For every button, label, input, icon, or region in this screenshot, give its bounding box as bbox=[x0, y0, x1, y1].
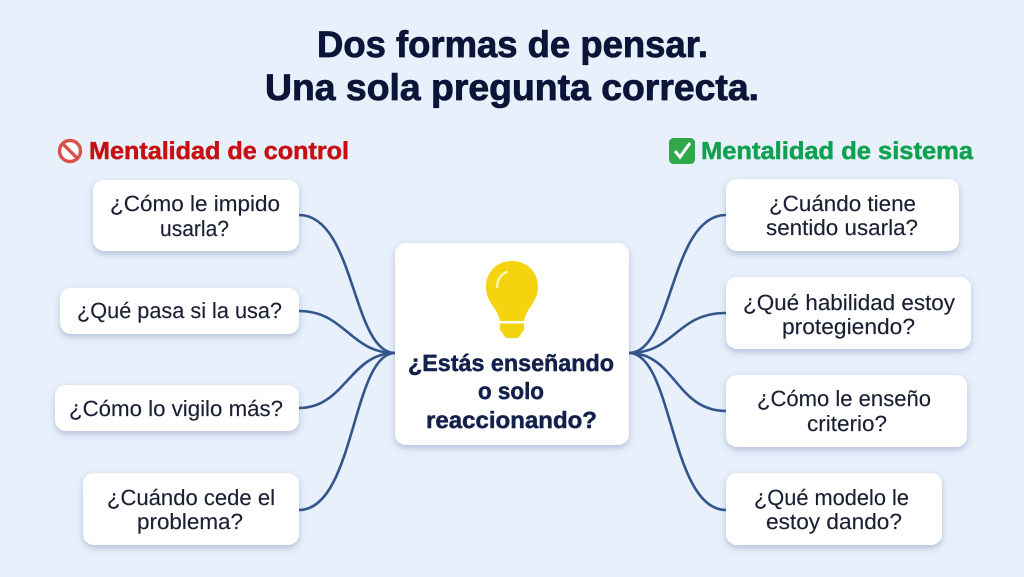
right card 3: criterio? bbox=[807, 411, 887, 436]
icon: check mark bbox=[669, 138, 695, 164]
right card 2: ¿Qué habilidad estoy bbox=[743, 290, 955, 315]
left card 4: problema? bbox=[137, 509, 243, 534]
connectors: right bbox=[629, 215, 726, 510]
left card 4: ¿Cuándo cede el bbox=[107, 485, 275, 510]
connectors: left bbox=[299, 215, 395, 510]
title bbox=[265, 24, 759, 108]
right card 2: protegiendo? bbox=[782, 314, 915, 339]
icon: prohibited sign bbox=[60, 140, 80, 162]
title: Una sola pregunta correcta. bbox=[265, 67, 759, 108]
right card 1: sentido usarla? bbox=[766, 215, 918, 240]
right card 3 bbox=[726, 375, 967, 447]
right card 1 bbox=[726, 179, 959, 251]
right card 4 bbox=[726, 473, 942, 545]
left card 1: usarla? bbox=[160, 216, 229, 241]
left card 4 bbox=[83, 473, 299, 545]
right card 3: ¿Cómo le enseño bbox=[757, 386, 931, 411]
heading: control mindset: Mentalidad de control bbox=[89, 138, 349, 165]
left card 1 bbox=[93, 180, 299, 251]
center card: ¿Estás enseñando bbox=[408, 350, 614, 376]
icon: light bulb bbox=[486, 261, 538, 338]
right card 4: ¿Qué modelo le bbox=[754, 485, 909, 510]
center card bbox=[395, 243, 629, 445]
left card 3: ¿Cómo lo vigilo más? bbox=[69, 396, 283, 421]
center card: reaccionando? bbox=[426, 407, 597, 433]
left card 3 bbox=[55, 385, 299, 431]
left card 2: ¿Qué pasa si la usa? bbox=[77, 298, 282, 323]
center card: o solo bbox=[478, 378, 544, 404]
right card 1: ¿Cuándo tiene bbox=[769, 191, 916, 216]
right card 2 bbox=[726, 277, 971, 349]
title: Dos formas de pensar. bbox=[317, 24, 708, 65]
left card 2 bbox=[60, 288, 299, 334]
right card 4: estoy dando? bbox=[766, 509, 902, 534]
left card 1: ¿Cómo le impido bbox=[110, 191, 280, 216]
heading: system mindset: Mentalidad de sistema bbox=[701, 138, 973, 165]
